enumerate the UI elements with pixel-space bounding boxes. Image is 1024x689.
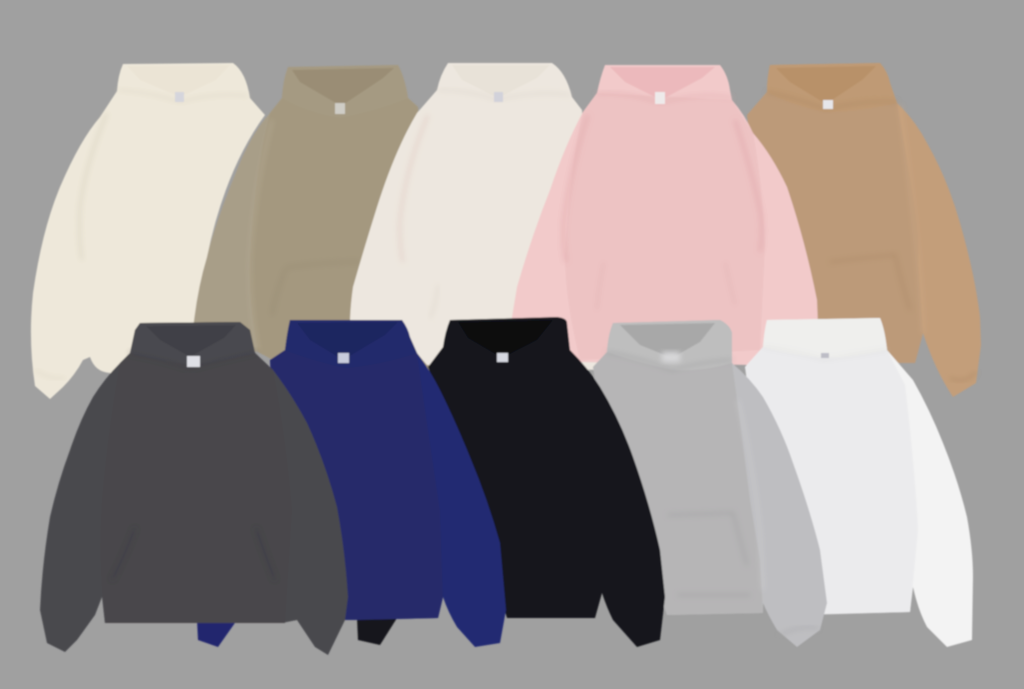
hoodie: black <box>428 317 665 647</box>
hoodie: cream <box>31 63 265 399</box>
hoodie: charcoal <box>40 322 348 655</box>
hoodie: navy <box>270 320 506 647</box>
hoodie: taupe <box>193 65 430 370</box>
hoodie: pink <box>512 65 818 365</box>
sleeve cuff: black hoodie behind navy <box>357 618 397 645</box>
hoodie: off-white <box>350 63 600 370</box>
hoodie: heather grey <box>593 320 827 647</box>
hoodie: tan <box>747 63 981 397</box>
sleeve cuff: navy hoodie behind charcoal <box>197 620 237 647</box>
hoodie: white <box>745 318 973 647</box>
